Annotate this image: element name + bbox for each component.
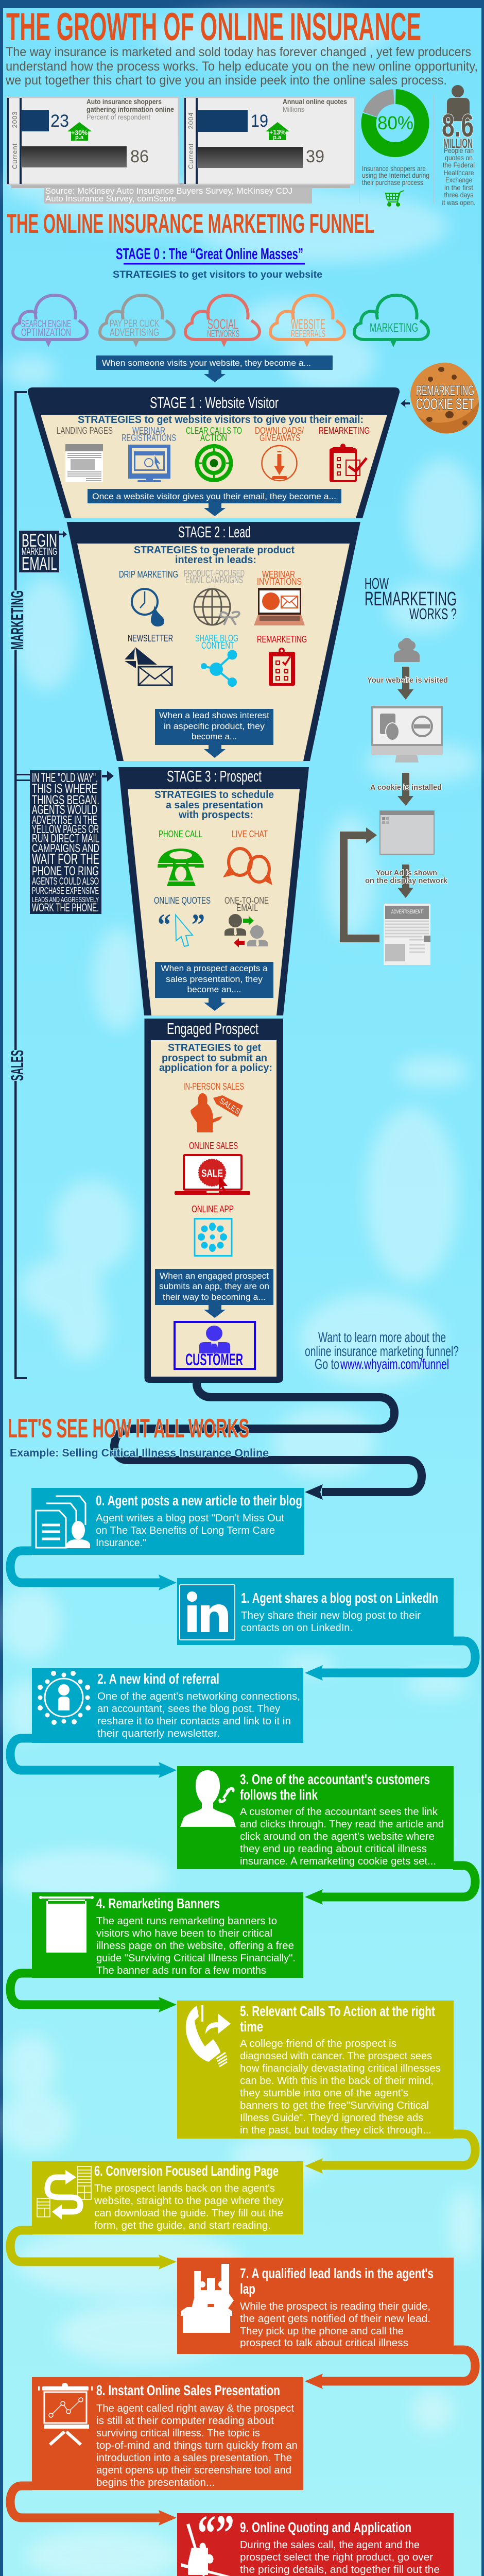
step 0: Insurance." (96, 1537, 146, 1549)
cloud: pay per click advertising: PAY PER CLICK (110, 318, 159, 329)
connector: step 4 to step 5 (10, 1973, 177, 2012)
banner: engaged becomes customer: their way to becoming a... (163, 1292, 266, 1302)
step 9: During the sales call, the agent and the (240, 2539, 420, 2551)
banner: visitors become: When someone visits your website, they become a... (102, 358, 311, 368)
step 7: lap (240, 2281, 255, 2297)
source note: Auto Insurance Survey, comScore (45, 194, 176, 204)
strategy: drip marketing: DRIP MARKETING (119, 569, 178, 580)
banner: lead becomes prospect: become a... (192, 732, 237, 741)
icon: quoting and puzzle (181, 2504, 234, 2576)
box: begin marketing email: EMAIL (22, 553, 57, 574)
box: in the old way (30, 770, 101, 914)
connector: step 5 to step 6 (305, 2134, 475, 2174)
box: in the old way: THINGS BEGAN. (32, 793, 99, 807)
funnel stage 2: lead: STRATEGIES to generate product (134, 545, 295, 556)
panel: annual online quotes chart: Current (187, 143, 195, 169)
box: in the old way: ADVERTISE IN THE (32, 813, 97, 826)
arrow with label: cookie installed (370, 773, 442, 806)
step 4: The banner ads run for a few months (96, 1965, 266, 1976)
cloud: marketing (354, 295, 428, 347)
funnel stage 1: website visitor: STRATEGIES to get website visitors to give you their email: (78, 414, 364, 426)
step 8: agent opens up their screenshare tool and (96, 2465, 291, 2476)
funnel stage 2: lead: STAGE 2 : Lead (178, 523, 251, 541)
funnel stage 4: engaged prospect (0, 574, 484, 2576)
strategy: clear calls to action: ACTION (200, 433, 227, 443)
label: sales (8, 1050, 27, 1081)
step 3 (177, 1766, 454, 1869)
strategy: webinar registrations (122, 426, 176, 482)
label: sales: SALES (8, 1050, 27, 1081)
icon: meeting at desk (181, 2264, 234, 2333)
people stat caption: it was open. (442, 198, 476, 207)
step 9: the pricing details, and together fill out the (240, 2564, 440, 2575)
connector: step 6 to step 7 (10, 2230, 177, 2269)
icon: advertisement page (384, 904, 430, 965)
step 8: top-of-mind and things turn quickly from an (96, 2440, 298, 2451)
customer box: CUSTOMER (185, 1350, 243, 1369)
box: in the old way: THIS IS WHERE (32, 782, 97, 796)
icon: documents and person (36, 1496, 90, 1548)
banner: email becomes lead: Once a website visitor gives you their email, they become a... (92, 492, 336, 501)
strategy: one-to-one email: ONE-TO-ONE (224, 895, 269, 906)
step 4: illness page on the website, offering a free (96, 1940, 294, 1952)
cloud: website referrals (270, 295, 344, 347)
step 4: guide "Surviving Critical Illness Financially". (96, 1953, 296, 1964)
cloud: search engine optimization (13, 295, 87, 347)
banner: lead becomes prospect (155, 709, 273, 758)
strategy: downloads giveaways: DOWNLOADS/ (255, 426, 304, 436)
heading: how remarketing works: HOW (365, 574, 389, 592)
step 3: follows the link (240, 1787, 318, 1803)
step 5: time (240, 2019, 263, 2035)
strategy: in-person sales: IN-PERSON SALES (183, 1081, 244, 1092)
panel: annual online quotes chart: +13% (269, 128, 286, 136)
step 0 (31, 1488, 304, 1555)
arrow with label: website visited (367, 667, 448, 700)
funnel stage 3: prospect: with prospects: (178, 809, 253, 821)
strategy: live chat: LIVE CHAT (232, 829, 268, 839)
cloud: search engine optimization: OPTIMIZATION (21, 327, 71, 338)
strategy: landing pages: LANDING PAGES (57, 426, 113, 436)
label: marketing (8, 590, 27, 650)
strategy: clear calls to action (186, 426, 242, 482)
heading: how remarketing works (365, 574, 457, 623)
icon: browser window (380, 811, 434, 854)
banner: email becomes lead (88, 489, 341, 516)
cookie: remarketing cookie set (410, 363, 479, 433)
strategy: downloads giveaways: GIVEAWAYS (260, 433, 300, 443)
icon: phone and arrow (186, 2005, 231, 2066)
strategy: online quotes: ” (192, 908, 205, 942)
strategy: webinar invitations: INVITATIONS (257, 577, 302, 587)
subheading: example: Example: Selling Critical Illness Insurance Online (10, 1447, 269, 1459)
panel: annual online quotes chart: 2004 (187, 112, 195, 129)
banner: prospect becomes engaged (155, 962, 273, 1011)
label: marketing: MARKETING (8, 590, 27, 650)
step 6: can download the guide. They fill out the (94, 2208, 283, 2219)
icon: presentation board (38, 2383, 93, 2445)
step 2: One of the agent's networking connections, (97, 1691, 300, 1702)
icon: person with link (180, 1770, 236, 1827)
banner: visitors become (96, 355, 333, 382)
icon: person with 8.6 million (442, 85, 474, 151)
connector: step 7 to step 8 (305, 2350, 475, 2389)
step 2 (32, 1668, 303, 1743)
step 3: click around on the agent's website where (240, 1831, 435, 1842)
strategy: share blog content (195, 633, 238, 687)
step 7 (177, 2258, 454, 2354)
strategy: newsletter (125, 633, 173, 685)
strategy: share blog content: SHARE BLOG (195, 633, 238, 643)
cloud: social networks: NETWORKS (207, 329, 239, 339)
step 8: 8. Instant Online Sales Presentation (96, 2382, 280, 2398)
call to action: learn more: Go to (315, 1356, 339, 1372)
panel: annual online quotes chart: Millions (283, 105, 304, 113)
strategy: online quotes: “ (158, 908, 171, 942)
strategy: drip marketing (119, 569, 178, 626)
strategy: clear calls to action: CLEAR CALLS TO (186, 426, 242, 436)
banner: prospect becomes engaged: sales presentation, they (166, 974, 263, 984)
step 8 (32, 2377, 303, 2490)
step 1 (177, 1578, 454, 1645)
strategy: downloads giveaways (255, 426, 304, 481)
strategy: online sales (175, 1141, 250, 1195)
icon: hanging banner (39, 1896, 94, 1953)
step 0: 0. Agent posts a new article to their blog (96, 1493, 302, 1509)
source note: Source: McKinsey Auto Insurance Buyers Survey, McKinsey CDJ (45, 186, 292, 196)
funnel stage 3: prospect: STAGE 3 : Prospect (167, 767, 262, 785)
step 9 (177, 2504, 454, 2576)
intro text: we put together this chart to give you an inside peek into the online sales process. (5, 73, 447, 88)
strategy: landing pages (57, 426, 113, 482)
step 5: Illness Guide". They'd ignored these ads (240, 2112, 423, 2124)
strategy: online app (192, 1204, 234, 1256)
funnel stage 2: lead (67, 522, 360, 761)
strategy: remarketing: REMARKETING (319, 426, 370, 436)
funnel stage 4: engaged prospect: application for a policy: (159, 1062, 272, 1074)
funnel stage 1: website visitor: STAGE 1 : Website Visitor (150, 394, 279, 412)
cloud: website referrals: REFERRALS (291, 329, 325, 339)
icon: advertisement page: ADVERTISEMENT (391, 909, 423, 915)
step 2: reshare it to their contacts and link to it in (97, 1716, 291, 1727)
step 6: website, straight to the page where they (94, 2195, 283, 2207)
people stat caption: in the first (444, 183, 473, 192)
strategy: online quotes (154, 895, 211, 946)
step 3: they end up reading about critical illness (240, 1843, 427, 1855)
donut caption: Insurance shoppers are (362, 164, 426, 173)
strategy: in-person sales (183, 1081, 244, 1132)
icon: group of visitors (394, 638, 420, 662)
strategy: in-person sales: SALES (218, 1096, 241, 1116)
panel: auto insurance shoppers chart (7, 97, 179, 184)
bracket: marketing and sales timeline (14, 391, 30, 1379)
heading: how remarketing works: WORKS ? (409, 605, 457, 623)
strategy: one-to-one email (224, 895, 269, 947)
arrow with label: ad shown: on the display network (365, 876, 448, 885)
step 0: on The Tax Benefits of Long Term Care (96, 1525, 275, 1536)
arrowhead: to step 0 (305, 1484, 323, 1500)
donut caption: their purchase process. (362, 178, 425, 187)
step 4 (32, 1892, 303, 1978)
funnel stage 4: engaged prospect: prospect to submit an (162, 1053, 267, 1064)
step 5: A college friend of the prospect is (240, 2038, 396, 2049)
step 9: 9. Online Quoting and Application (240, 2519, 411, 2535)
banner: prospect becomes engaged: When a prospect accepts a (161, 963, 268, 973)
people stat caption: the Federal (443, 161, 475, 169)
step 8: The agent called right away & the prospect (96, 2403, 294, 2414)
step 1: They share their new blog post to their (241, 1610, 421, 1621)
box: in the old way: LEADS AND AGGRESSIVELY (32, 895, 99, 904)
people stat caption: Healthcare (444, 168, 474, 177)
arrow with label: cookie installed: A cookie is installed (370, 783, 442, 792)
box: in the old way: AGENTS COULD ALSO (32, 876, 99, 887)
step 8: surviving critical illness. The topic is (96, 2428, 260, 2439)
panel: auto insurance shoppers chart: Percent of respondent (87, 113, 150, 121)
funnel stage 3: prospect: STRATEGIES to schedule (154, 789, 274, 801)
funnel stage 3: prospect (118, 767, 309, 1015)
cloud: social networks: SOCIAL (208, 316, 238, 332)
cloud: marketing: MARKETING (370, 321, 418, 335)
banner: lead becomes prospect: in aspecific product, they (164, 721, 265, 731)
step 7: They pick up the phone and call the (240, 2326, 404, 2337)
icon: referral network (38, 1671, 91, 1725)
icon: shopping cart (386, 191, 404, 206)
people stat caption (442, 146, 476, 207)
strategy: online sales: SALE (201, 1168, 223, 1179)
strategy: remarketing clipboard (257, 634, 307, 686)
people stat caption: three days (444, 191, 474, 199)
box: in the old way: PURCHASE EXPENSIVE (32, 886, 99, 896)
step 9: prospect select the right product, go over (240, 2552, 433, 2563)
step 5: can be. With this in the back of their mind, (240, 2075, 434, 2087)
step 2: an accountant, sees the blog post. They (97, 1703, 280, 1715)
step 7: the agent gets notified of their new lead. (240, 2313, 430, 2325)
people stat caption: quotes on (445, 154, 473, 162)
cloud: social networks (185, 295, 260, 347)
step 6: 6. Conversion Focused Landing Page (94, 2163, 279, 2179)
step 5: in the past, but today they click through... (240, 2125, 431, 2136)
cloud: pay per click advertising: ADVERTISING (110, 327, 159, 338)
box: begin marketing email (19, 531, 59, 574)
funnel stage 1: website visitor (28, 387, 400, 518)
step 5: how financially devastating critical illnesses (240, 2063, 441, 2074)
strategy: online sales: ONLINE SALES (189, 1141, 238, 1151)
intro text (5, 45, 478, 88)
strategy: remarketing clipboard: REMARKETING (257, 634, 307, 645)
source note (44, 186, 312, 204)
panel: annual online quotes chart: 39 (306, 147, 324, 166)
box: in the old way: WAIT FOR THE (32, 851, 99, 868)
strategy: product-focused email campaigns: PRODUCT-FOCUSED (184, 568, 245, 579)
heading: let's see how it all works: LET'S SEE HOW IT ALL WORKS (8, 1414, 249, 1444)
panel: auto insurance shoppers chart: Auto insurance shoppers (87, 97, 162, 106)
box: in the old way: YELLOW PAGES OR (32, 822, 99, 836)
step 3: and clicks through. They read the article and (240, 1819, 444, 1830)
panel: annual online quotes chart: Annual online quotes (283, 97, 347, 106)
icon: linkedin (180, 1585, 235, 1640)
strategy: online app: ONLINE APP (192, 1204, 234, 1214)
panel: annual online quotes chart: p.a (273, 134, 282, 141)
call to action: learn more (305, 1329, 459, 1372)
cloud: website referrals: WEBSITE (291, 316, 325, 332)
banner: engaged becomes customer: submits an app, they are on (159, 1281, 269, 1291)
arrow with label: website visited: Your website is visited (367, 676, 448, 685)
strategy: product-focused email campaigns: EMAIL CAMPAIGNS (185, 575, 243, 585)
strategy: live chat (223, 829, 272, 885)
connector: step 1 to step 2 (305, 1641, 475, 1681)
cloud: pay per click advertising (100, 295, 174, 347)
chart shadow (11, 183, 350, 188)
step 5: they stumble into one of the agent's (240, 2088, 408, 2099)
step 3: A customer of the accountant sees the link (240, 1806, 438, 1818)
connector: step 8 to step 9 (10, 2486, 177, 2526)
step 5: banners to get the free"Surviving Critical (240, 2100, 429, 2111)
icon: conversion flow (37, 2166, 91, 2219)
step 0: Agent writes a blog post "Don't Miss Out (96, 1513, 284, 1524)
arrow: cookie to funnel (401, 399, 410, 408)
arrow: begin email to stage 2 (59, 531, 67, 538)
panel: auto insurance shoppers chart: Current (11, 143, 19, 169)
step 3: insurance. A remarketing cookie gets set... (240, 1856, 436, 1867)
panel: auto insurance shoppers chart: p.a (75, 134, 84, 141)
step 6: form, get the guide, and start reading. (94, 2220, 271, 2231)
strategy: phone call (158, 829, 204, 886)
box: in the old way: IN THE "OLD WAY", (32, 771, 98, 785)
funnel stage 3: prospect: a sales presentation (166, 800, 263, 811)
strategy: online quotes: ONLINE QUOTES (154, 895, 211, 906)
panel: auto insurance shoppers chart: gathering information online (87, 105, 174, 113)
panel: auto insurance shoppers chart: 86 (130, 147, 149, 166)
strategy: webinar invitations: WEBINAR (262, 569, 295, 580)
icon: desktop computer (371, 706, 443, 762)
box: in the old way: PHONE TO RING (32, 864, 99, 878)
funnel stage 4: engaged prospect: Engaged Prospect (167, 1020, 258, 1038)
donut chart: 80%: 80% (377, 112, 413, 133)
strategy: phone call: PHONE CALL (159, 829, 202, 839)
strategy: remarketing (319, 426, 370, 482)
stage 0 heading (113, 245, 322, 280)
step 5 (177, 2001, 454, 2139)
strategy: one-to-one email: EMAIL (236, 903, 258, 913)
step 6 (32, 2161, 303, 2234)
box: begin marketing email: BEGIN (22, 531, 57, 551)
panel: auto insurance shoppers chart: 23 (50, 111, 69, 131)
panel: annual online quotes chart: 19 (251, 111, 268, 131)
box: in the old way: RUN DIRECT MAIL (32, 832, 99, 845)
stage 0 heading: STAGE 0 : The “Great Online Masses” (116, 245, 303, 263)
step 5: diagnosed with cancer. The prospect sees (240, 2050, 432, 2062)
step 1: contacts on on LinkedIn. (241, 1622, 353, 1634)
panel: annual online quotes chart (184, 97, 355, 184)
step 2: 2. A new kind of referral (97, 1671, 219, 1687)
strategy: product-focused email campaigns (184, 568, 245, 625)
customer box (175, 1322, 255, 1369)
connector: step 3 to step 4 (305, 1866, 475, 1905)
arrow with label: ad shown (365, 865, 448, 898)
step 2: their quarterly newsletter. (97, 1728, 220, 1739)
strategy: share blog content: CONTENT (201, 640, 234, 651)
step 8: begins the presentation... (96, 2477, 215, 2488)
arrow: old way to stage 3 (102, 771, 114, 782)
banner: lead becomes prospect: When a lead shows interest (159, 710, 269, 720)
stage 0 heading: STRATEGIES to get visitors to your website (113, 269, 322, 280)
banner: engaged becomes customer (155, 1269, 273, 1318)
step 4: visitors who have been to their critical (96, 1928, 272, 1939)
people stat caption: Exchange (445, 176, 472, 184)
strategy: webinar registrations: WEBINAR (132, 426, 165, 436)
step 4: The agent runs remarketing banners to (96, 1916, 277, 1927)
step 4: 4. Remarketing Banners (96, 1895, 220, 1911)
strategy: newsletter: NEWSLETTER (128, 633, 173, 643)
box: begin marketing email: MARKETING (22, 546, 57, 557)
step 8: introduction into a sales presentation. The (96, 2452, 292, 2464)
donut chart: 80% (361, 90, 429, 157)
step 7: While the prospect is reading their guide, (240, 2301, 430, 2312)
donut caption: using the Internet during (362, 171, 429, 179)
connector: step 2 to step 3 (10, 1738, 177, 1778)
funnel stage 4: engaged prospect: STRATEGIES to get (168, 1042, 261, 1054)
arrow: remarketing loop (340, 827, 379, 942)
step 8: is still at their computer reading about (96, 2415, 274, 2427)
box: in the old way: CAMPAIGNS AND (32, 841, 99, 855)
donut caption (362, 164, 429, 187)
step 6: The prospect lands back on the agent's (94, 2183, 275, 2194)
icon: quoting and puzzle: ” (216, 2504, 234, 2562)
arrow with label: ad shown: Your Ad is shown (376, 869, 437, 877)
strategy: webinar invitations (254, 569, 305, 625)
panel: auto insurance shoppers chart: 2003 (11, 111, 19, 128)
step 7: prospect to talk about critical illness (240, 2337, 408, 2349)
panel: auto insurance shoppers chart: +30% (71, 129, 88, 137)
funnel stage 2: lead: interest in leads: (175, 554, 256, 566)
icon: quoting and puzzle: “ (197, 2504, 216, 2562)
connector: funnel to steps (114, 1381, 422, 1492)
banner: engaged becomes customer: When an engaged prospect (160, 1271, 269, 1281)
box: in the old way: AGENTS WOULD (32, 803, 97, 817)
connector: step 0 to step 1 (10, 1551, 177, 1590)
people stat caption: People ran (444, 146, 474, 155)
banner: prospect becomes engaged: become an.... (187, 985, 241, 994)
box: in the old way: WORK THE PHONE. (32, 901, 99, 914)
strategy: webinar registrations: REGISTRATIONS (122, 433, 176, 443)
cloud: search engine optimization: SEARCH ENGINE (21, 319, 71, 330)
